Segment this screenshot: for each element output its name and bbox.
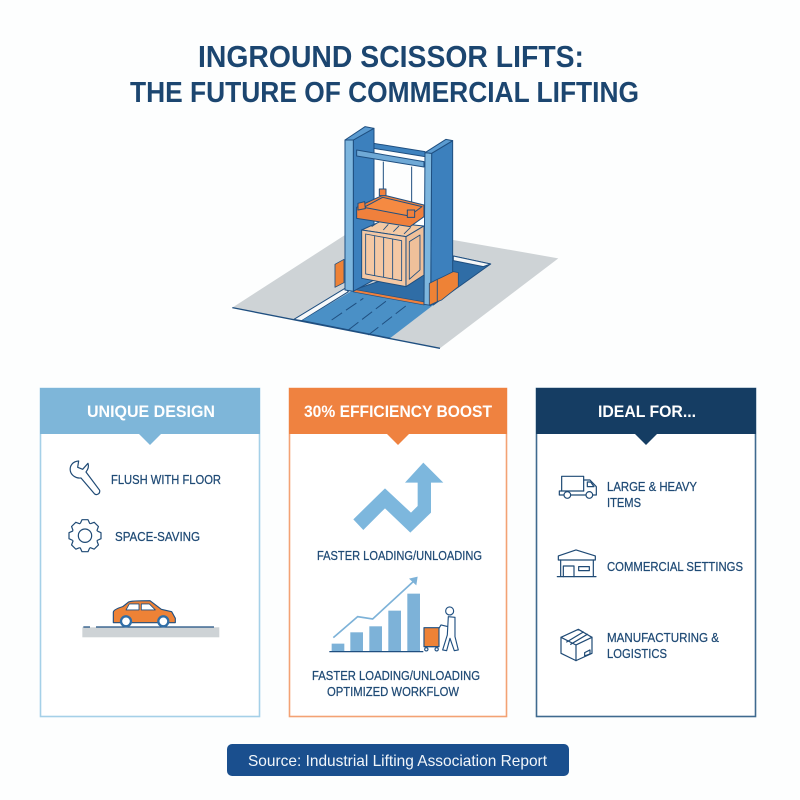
orange side bumpers [335,259,458,305]
text: manufacturing and logistics [607,630,719,661]
icon: package box [561,629,592,661]
text: commercial settings: COMMERCIAL SETTINGS [607,559,743,574]
right post [424,139,453,305]
text: manufacturing and logistics: LOGISTICS [607,646,667,661]
rear beam [369,143,425,157]
panel header: ideal for [536,388,756,445]
panel header: efficiency boost [289,388,507,445]
icon: worker with cart [424,607,458,651]
cables [383,162,412,210]
panel: unique design [40,388,260,716]
title: INGROUND SCISSOR LIFTS: [198,39,584,74]
orange threshold [353,289,424,305]
icon: gear [69,520,101,552]
text: large and heavy items [607,479,697,510]
panel header: ideal for: IDEAL FOR... [598,402,696,421]
text: flush with floor: FLUSH WITH FLOOR [111,472,221,487]
white side strip [294,288,348,321]
text: space-saving: SPACE-SAVING [115,529,200,544]
panel header: efficiency boost: 30% EFFICIENCY BOOST [304,402,493,421]
icon: wrench [70,461,100,495]
floor slab [232,235,558,348]
text: large and heavy items: ITEMS [607,495,641,510]
text: faster loading/unloading: FASTER LOADING/UNLOADING [317,548,482,563]
panel: efficiency boost [289,388,507,716]
icon: zigzag up arrow [353,463,443,533]
bar chart with rising trend [329,577,423,652]
panel header: unique design: UNIQUE DESIGN [87,402,215,421]
text: manufacturing and logistics: MANUFACTURING & [607,630,719,645]
title [130,39,639,109]
panel header: unique design [40,388,260,445]
text: faster loading and optimized workflow [312,668,480,699]
lowered ramp with lane markings [302,290,433,338]
title: THE FUTURE OF COMMERCIAL LIFTING [130,77,639,109]
source badge [227,744,569,776]
crate [362,222,424,287]
front beam [357,150,424,167]
text: faster loading and optimized workflow: FASTER LOADING/UNLOADING [312,668,480,683]
text: large and heavy items: LARGE & HEAVY [607,479,697,494]
text: faster loading and optimized workflow: OPTIMIZED WORKFLOW [327,684,460,699]
icon: truck [559,476,596,498]
left post [345,127,374,291]
icon: warehouse [557,550,596,577]
icon: car on flush floor [82,601,219,637]
orange platform [357,189,424,227]
panel: ideal for [536,388,756,716]
pit opening [353,256,491,305]
illustration: inground scissor lift with crate [232,127,558,348]
source badge: Source: Industrial Lifting Association Report [248,753,548,770]
